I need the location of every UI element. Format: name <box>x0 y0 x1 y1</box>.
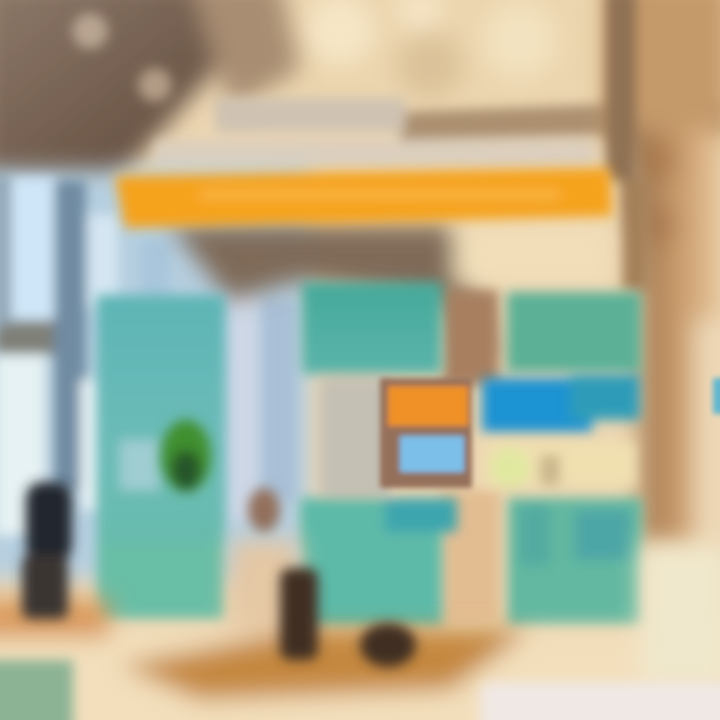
window wall: glass panes <box>0 170 310 580</box>
panel: right cream strip <box>485 442 635 488</box>
ceiling: dark wood section <box>0 0 300 190</box>
window wall: bright panes and mullions <box>0 175 296 535</box>
column edge <box>606 0 648 290</box>
panel: right teal top <box>507 292 641 372</box>
corner: white counter <box>480 682 720 720</box>
panel: right teal bottom <box>508 498 642 626</box>
icon: ceiling lights <box>72 13 172 102</box>
floor <box>0 540 720 720</box>
figure: right dark silhouette <box>360 623 416 667</box>
panel: left teal <box>97 295 225 620</box>
corner: green cushion <box>0 660 73 720</box>
small card: orange and blue <box>380 378 472 488</box>
brown post beside centre panel <box>440 290 500 620</box>
banner: orange header <box>115 168 612 228</box>
right wood column <box>605 0 720 545</box>
dark structure under banner <box>170 225 610 370</box>
ceiling beam <box>155 98 720 168</box>
figure: left dark silhouette <box>22 482 72 619</box>
edge: right blue accent <box>713 378 720 414</box>
ceiling: ornate cream medallion <box>250 0 610 110</box>
panel: centre teal <box>300 282 457 626</box>
panel: right blue strip <box>482 374 640 432</box>
figure: centre dark silhouette <box>248 488 318 660</box>
icon: green plant <box>161 420 211 492</box>
